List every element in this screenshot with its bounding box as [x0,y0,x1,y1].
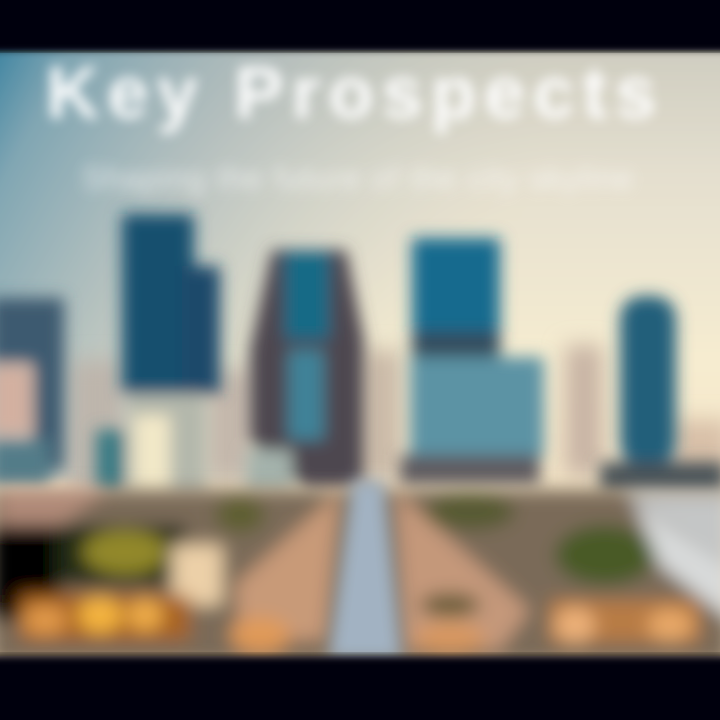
building 3 [400,238,544,485]
top black band [0,0,720,50]
title: Key Prospects [46,51,664,134]
central road [328,480,402,660]
building 2 [246,250,364,490]
building 4 [600,296,720,492]
subtitle: Shaping the future of the city skyline [82,160,634,196]
building 1 [96,214,220,500]
ground and trees [0,488,720,665]
distant buildings [70,345,720,490]
bottom black band [0,656,720,720]
left arch building [0,298,64,485]
